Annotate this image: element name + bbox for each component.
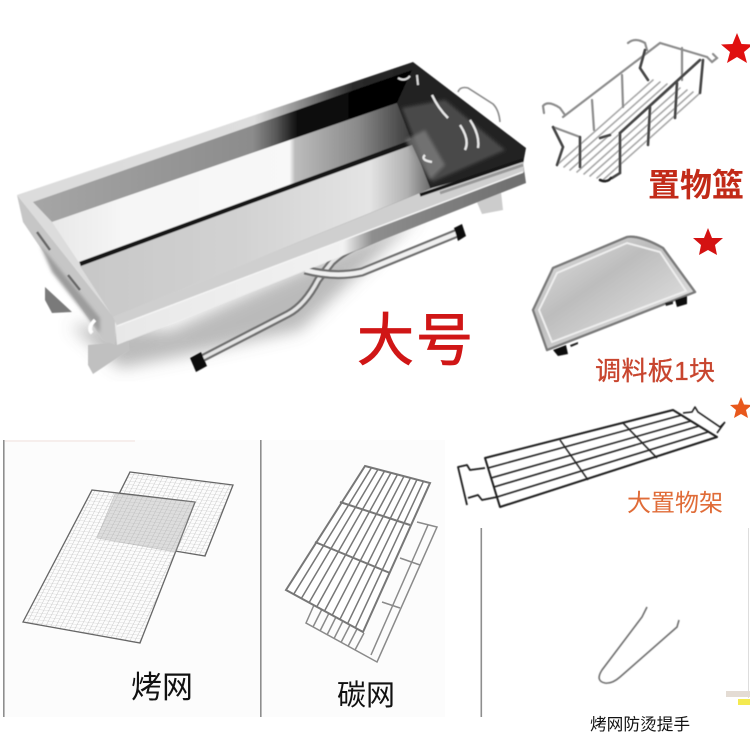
plate feet (553, 345, 568, 356)
mesh overlap (97, 494, 195, 552)
label: charcoal rack: 碳网 (337, 679, 395, 712)
label: basket: 置物篮 (648, 167, 744, 203)
label: seasoning plate: 调料板1块 (595, 356, 715, 386)
label: tongs: 烤网防烫提手 (590, 715, 690, 734)
front charcoal rack (286, 466, 430, 632)
rear charcoal rack (306, 522, 437, 662)
label: large size: 大号 (357, 309, 475, 373)
interior upper floor (52, 103, 412, 264)
rack rods (488, 415, 708, 497)
front mesh (23, 490, 195, 643)
basket front rail and posts (553, 50, 703, 178)
back rim (17, 62, 526, 319)
black seam (80, 142, 412, 264)
rear mesh (97, 472, 233, 556)
right wire handle (458, 88, 500, 122)
icon: red star plate (693, 228, 723, 255)
basket feet (600, 178, 611, 181)
product: charcoal rack (286, 466, 437, 662)
label: large rack: 大置物架 (627, 490, 723, 517)
rack frame (485, 410, 717, 507)
product: grill mesh (23, 472, 233, 643)
product: storage basket (543, 40, 717, 181)
near foot (88, 341, 129, 374)
product: large stainless grill (17, 62, 526, 374)
ground shadow (70, 215, 420, 368)
front face (115, 162, 526, 345)
label: grill mesh: 烤网 (131, 670, 193, 705)
right foot (476, 192, 503, 214)
handle caps (190, 352, 207, 372)
icon: orange star rack (730, 397, 750, 418)
product: tongs (599, 607, 679, 683)
basket floor rods (557, 80, 700, 180)
folding handle front rod (305, 232, 460, 275)
interior lower floor (80, 145, 432, 317)
panel: lower accessories backdrop (5, 440, 445, 717)
interior back wall (33, 70, 412, 222)
folding handle rear rod (195, 228, 400, 362)
right interior wall (397, 70, 523, 190)
rack left hook (458, 465, 497, 505)
product: seasoning plate (533, 237, 695, 356)
basket back rail and posts (543, 40, 717, 137)
front rim (113, 162, 524, 326)
left foot (45, 287, 72, 313)
divider lines (3, 440, 750, 717)
icon: red star basket (721, 33, 750, 63)
rack right hook (683, 407, 725, 433)
product: large rack (458, 407, 725, 507)
left end face (17, 195, 115, 345)
